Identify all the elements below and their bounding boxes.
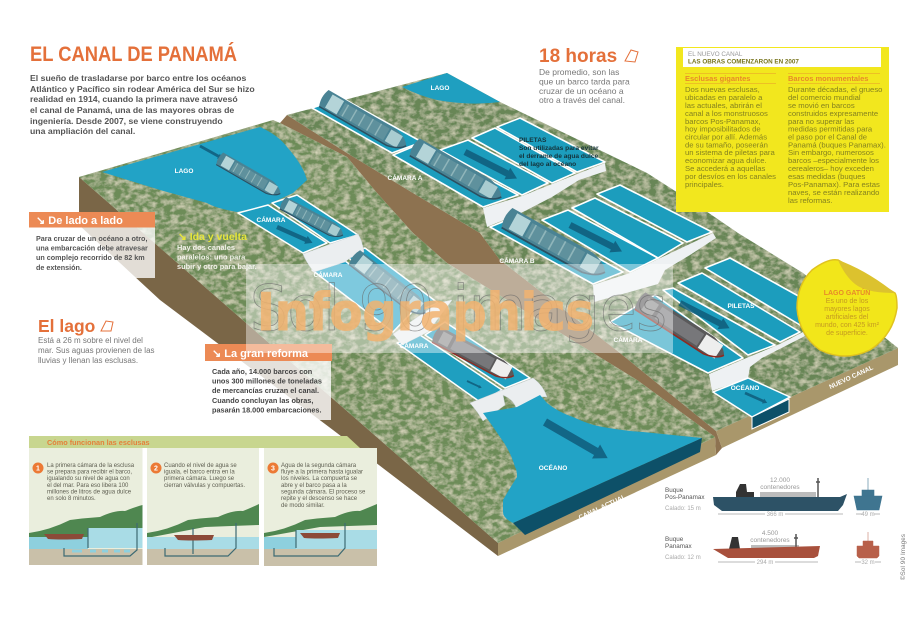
callout: ida y vuelta: ↘ Ida y vuelta: [178, 231, 247, 243]
ship front view: [854, 478, 882, 510]
column: esclusas gigantes: circular por allí. Además: [685, 132, 767, 142]
column: barcos monumentales: esas medidas (buques: [788, 172, 866, 181]
locks: new canal C: [610, 258, 820, 373]
column: esclusas gigantes: las actuales, abrirán el: [685, 101, 762, 110]
sticker: lago gatún: de superficie.: [826, 330, 868, 337]
panel: 18 horas: otro a través del canal.: [539, 95, 625, 105]
lock gates: current canal: [303, 234, 547, 421]
panel: buque panamax: 294 m: [757, 560, 773, 566]
label: nuevo canal: NUEVO CANAL: [828, 364, 874, 391]
callout: ida y vuelta: [177, 231, 257, 271]
map labels: CÁMARA B: [499, 256, 535, 265]
title: EL CANAL DE PANAMÁ: [30, 43, 237, 66]
step 2: [147, 448, 259, 565]
locks: new canal A: [312, 98, 605, 207]
panel: buque pos-panamax: 49 m: [861, 512, 875, 518]
column: barcos monumentales: construidos expresamente: [788, 109, 878, 118]
column: esclusas gigantes: Esclusas gigantes: [685, 74, 750, 83]
panel: el lago: [38, 316, 155, 365]
column: esclusas gigantes: economizar agua dulce.: [685, 156, 767, 165]
locks: new canal B: [490, 185, 712, 284]
credit: ©Sol 90 Images: [900, 534, 907, 580]
panel: 18 horas: 18 horas: [539, 46, 617, 67]
column: barcos monumentales: cerealeros– hoy exceden: [788, 164, 874, 173]
ocean, current canal: [483, 395, 702, 523]
panel: el nuevo canal: EL NUEVO CANAL: [688, 51, 743, 58]
panel: buque pos-panamax: [665, 477, 882, 518]
canal illustration: [79, 73, 898, 556]
step 2: iguala, el barco entra en la: [164, 470, 235, 476]
sticker: lago gatún: LAGO GATÚN: [824, 288, 870, 297]
column: barcos monumentales: el paso por el Canal de: [788, 132, 867, 142]
panel: buque panamax: 32 m: [861, 560, 875, 566]
panel: la gran reforma: Cuando concluyan las obras,: [212, 396, 313, 405]
column: barcos monumentales: naves, se están realizando: [788, 188, 879, 197]
column: barcos monumentales: Panamá (buques Panamax).: [788, 140, 886, 150]
watermark: Infographics: [257, 283, 594, 343]
step 3: segunda cámara. El proceso se: [281, 490, 366, 496]
sticker: lago gatún: artificiales del: [826, 314, 869, 321]
panel: buque pos-panamax: Pos-Panamax: [665, 494, 705, 501]
ship front view: [857, 532, 879, 558]
panel: buque panamax: [665, 530, 881, 566]
panel: la gran reforma: pasarán 18.000 embarcaciones.: [212, 406, 322, 414]
label: canal actual: CANAL ACTUAL: [578, 494, 627, 522]
column: esclusas gigantes: un sistema de piletas para: [685, 148, 775, 157]
panel: de lado a lado: [29, 212, 155, 278]
step 3: 3: [271, 466, 275, 472]
step 1: el del mar. Para eso libera 100: [47, 483, 129, 489]
map labels: CÁMARA: [400, 341, 429, 350]
panel: buque panamax: contenedores: [750, 537, 790, 544]
panel: buque panamax: Buque: [665, 536, 684, 543]
upper lake, new canal: [402, 73, 500, 104]
intro text: Atlántico y Pacífico sin rodear América del Sur se hizo: [30, 84, 255, 94]
panel: de lado a lado: Para cruzar de un océano a otro,: [36, 234, 147, 243]
panel: la gran reforma: de mercancías cruzan el canal.: [212, 386, 319, 395]
column: esclusas gigantes: por desvíos en los canales: [685, 172, 776, 181]
panel: 18 horas: que un barco tarda para: [539, 76, 630, 86]
intro text: una ampliación del canal.: [30, 126, 135, 136]
column: barcos monumentales: Pos-Panamax). Para estas: [788, 180, 880, 189]
locks: current canal: [238, 195, 530, 402]
panel: 18 horas: [539, 46, 638, 105]
panel: el lago: mar. Sus aguas provienen de las: [38, 346, 155, 355]
column: esclusas gigantes: canal a los monstruosos: [685, 109, 768, 118]
step 2: cierran válvulas y compuertas.: [164, 483, 245, 489]
flow arrows: [199, 143, 768, 465]
panel: el nuevo canal: LAS OBRAS COMENZARON EN 2007: [688, 58, 799, 66]
step 3: los niveles. La compuerta se: [281, 476, 358, 482]
wall A: [483, 163, 606, 227]
panel: el lago: Está a 26 m sobre el nivel del: [38, 336, 143, 345]
column: esclusas gigantes: hoy imposibilitados de: [685, 124, 761, 134]
ocean front, new canal: [752, 399, 789, 429]
map labels: LAGO: [175, 168, 193, 175]
ship side view: [713, 478, 847, 511]
map labels: CÁMARA: [314, 270, 343, 279]
panel: de lado a lado: una embarcación debe atravesar: [36, 244, 148, 252]
column: barcos monumentales: [788, 74, 886, 205]
map labels: CÁMARA: [257, 215, 286, 224]
lake, current canal: [102, 127, 307, 212]
step 3: abre y el barco pasa a la: [281, 483, 347, 489]
icon: note: [101, 321, 113, 331]
column: esclusas gigantes: barcos Pos-Panamax,: [685, 117, 761, 126]
callout: ida y vuelta: paralelos: uno para: [177, 252, 246, 262]
column: esclusas gigantes: Se accederá a aquellas: [685, 164, 766, 173]
panel: la gran reforma: ↘ La gran reforma: [212, 348, 309, 360]
column: barcos monumentales: las reformas.: [788, 196, 832, 205]
step 1: igualando su nivel de agua con: [47, 476, 130, 482]
intro text: realidad en 1914, cuando la primera nave atravesó: [30, 94, 238, 104]
step 2: primera cámara. Luego se: [164, 476, 235, 482]
step 1: se prepara para recibir el barco,: [47, 470, 132, 476]
panel: de lado a lado: ↘ De lado a lado: [36, 215, 123, 227]
watermark: Sol 90 images: [250, 272, 667, 345]
step 1: en solo 8 minutos.: [47, 496, 96, 502]
sticker: lago gatún: mundo, con 425 km²: [815, 322, 880, 329]
map labels: PILETAS: [728, 303, 755, 310]
step 3: de modo similar.: [281, 503, 325, 509]
panel: el lago: El lago: [38, 316, 95, 336]
sticker: lago gatún: mayores lagos: [824, 306, 870, 313]
callout: piletas: del lago al océano: [519, 161, 576, 168]
intro text: ingeniería. Desde 2007, se viene construyendo: [30, 116, 223, 126]
panel: la gran reforma: unos 300 millones de toneladas: [212, 376, 322, 386]
panel: 18 horas: cruzar de un océano a: [539, 86, 624, 96]
panel: la gran reforma: Cada año, 14.000 barcos con: [212, 367, 312, 376]
callout: ida y vuelta: Hay dos canales: [177, 243, 235, 252]
column: esclusas gigantes: principales.: [685, 180, 724, 189]
column: barcos monumentales: barcos –especialmente los: [788, 156, 879, 165]
column: esclusas gigantes: ubicadas en paralelo a: [685, 93, 763, 102]
callout: piletas: el derrame de agua dulce: [519, 153, 598, 160]
step 3: repite y el descenso se hace: [281, 496, 358, 502]
column: esclusas gigantes: Dos nuevas esclusas,: [685, 85, 760, 94]
panel: buque pos-panamax: 366 m: [767, 512, 783, 518]
panel: buque pos-panamax: 12.000: [770, 477, 790, 484]
step 3: [264, 448, 377, 566]
panel: como funcionan las esclusas: [29, 436, 377, 566]
panel: buque pos-panamax: Calado: 15 m: [665, 506, 701, 512]
wall C: [709, 332, 805, 391]
block: current canal land: [79, 120, 715, 543]
sticker: lago gatún: [797, 260, 897, 356]
panel: buque pos-panamax: Buque: [665, 487, 684, 494]
map labels: LAGO: [431, 85, 449, 92]
column: barcos monumentales: Durante décadas, el grueso: [788, 85, 882, 94]
block: current canal front face: [498, 437, 716, 556]
callout: piletas: PILETAS: [519, 137, 547, 144]
panel: la gran reforma: [205, 344, 332, 420]
map labels: OCÉANO: [731, 383, 759, 392]
column: esclusas gigantes: [685, 74, 776, 189]
intro text: el canal de Panamá, una de las mayores obras de: [30, 105, 234, 115]
column: barcos monumentales: Barcos monumentales: [788, 74, 868, 83]
column: barcos monumentales: para no superar las: [788, 117, 854, 126]
ocean front cut: [513, 438, 702, 535]
panel: buque panamax: Calado: 12 m: [665, 555, 701, 561]
panel: el nuevo canal: [676, 47, 889, 212]
wall B: [593, 233, 716, 302]
ship side view: [713, 534, 820, 558]
panel: 18 horas: De promedio, son las: [539, 67, 619, 77]
step 1: 1: [36, 466, 40, 472]
callout: piletas: Son utilizadas para evitar: [519, 145, 599, 152]
panel: el lago: lluvias y llenan las esclusas.: [38, 356, 138, 365]
panel: como funcionan las esclusas: Cómo funcionan las esclusas: [47, 438, 150, 447]
ocean, new canal: [713, 378, 790, 417]
column: esclusas gigantes: de su tamaño, poseerán: [685, 140, 768, 150]
intro text: El sueño de trasladarse por barco entre los océanos: [30, 73, 246, 83]
block: new canal front face: [716, 348, 898, 448]
panel: buque panamax: 4.500: [762, 530, 779, 537]
step 1: millones de litros de agua dulce: [47, 490, 132, 496]
gorge between both canals: [280, 115, 722, 455]
panel: de lado a lado: un complejo recorrido de 82 km: [36, 253, 145, 262]
panel: buque pos-panamax: contenedores: [760, 484, 800, 491]
step 3: Agua de la segunda cámara: [281, 463, 357, 469]
column: barcos monumentales: Sin embargo, numerosos: [788, 148, 874, 157]
column: barcos monumentales: del comercio mundial: [788, 93, 861, 102]
block: current canal left face: [79, 177, 498, 556]
icon: note: [625, 50, 638, 62]
map labels: CÁMARA: [614, 335, 643, 344]
column: barcos monumentales: medidas permitidas para: [788, 124, 873, 134]
column: barcos monumentales: se movió en barcos: [788, 101, 855, 110]
block: new canal land: [287, 73, 898, 431]
panel: de lado a lado: de extensión.: [36, 263, 82, 272]
step 2: 2: [154, 466, 158, 472]
map labels: OCÉANO: [539, 463, 567, 472]
step 3: fluye a la primera hasta igualar: [281, 470, 363, 476]
panel: buque panamax: Panamax: [665, 543, 692, 550]
ships: [215, 89, 729, 383]
map labels: [175, 85, 759, 472]
step 1: La primera cámara de la esclusa: [47, 463, 135, 469]
map labels: CÁMARA A: [388, 173, 423, 182]
step 2: Cuando el nivel de agua se: [164, 463, 237, 469]
sticker: lago gatún: Es uno de los: [826, 298, 869, 305]
callout: ida y vuelta: subir y otro para bajar.: [177, 262, 257, 271]
step 1: [29, 448, 142, 565]
header: [29, 436, 360, 448]
